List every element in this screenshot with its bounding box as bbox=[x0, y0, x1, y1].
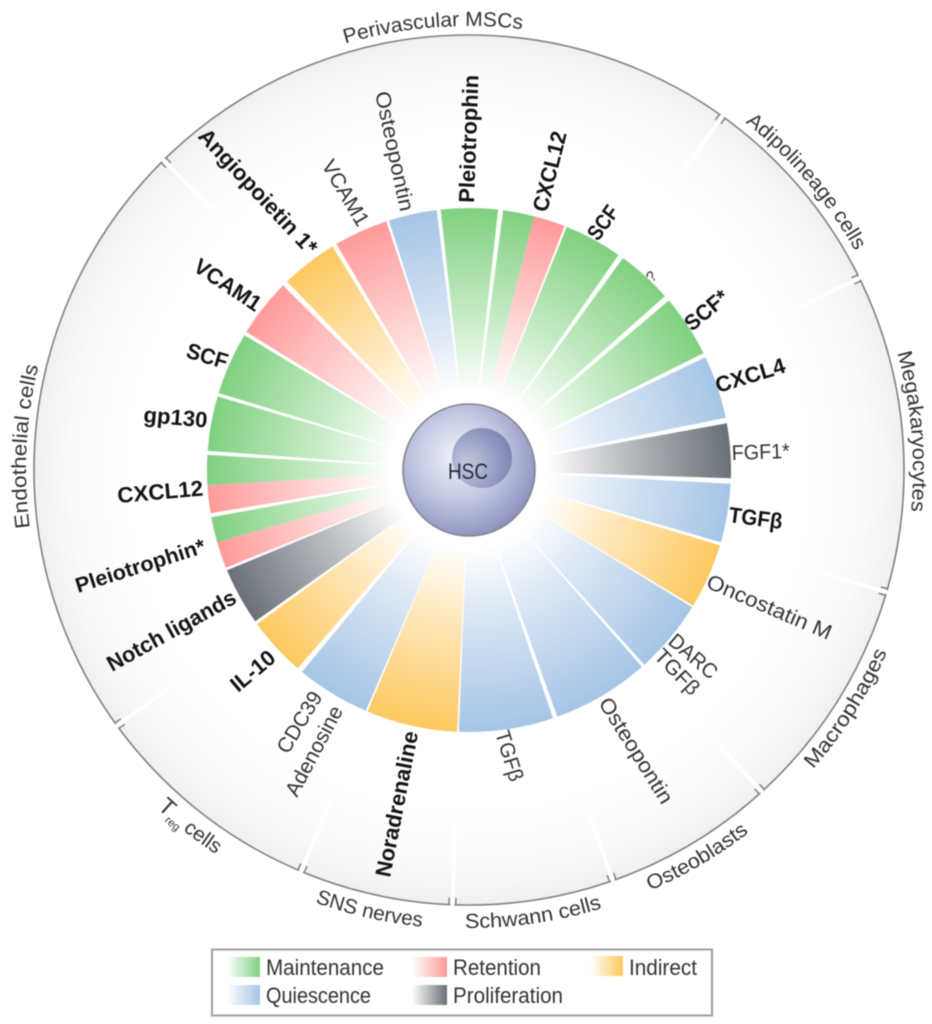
wedge chart bbox=[207, 208, 731, 732]
label: CXCL12 (endothelial): CXCL12 bbox=[116, 476, 204, 508]
wedge: gp130 bbox=[208, 396, 469, 470]
wedge: Pleiotrophin star retention bbox=[217, 470, 469, 568]
legend item: Indirect: Indirect bbox=[629, 955, 697, 980]
ring label: Treg cells: cells bbox=[184, 823, 221, 854]
ring label: Adipolineage cells: Adipolineage cells bbox=[745, 114, 864, 250]
wedge: FGF1 star bbox=[469, 423, 731, 478]
wedge: Noradrenaline bbox=[368, 470, 469, 732]
HSC cell bbox=[403, 404, 535, 536]
ring label: Treg cells: T bbox=[161, 796, 178, 814]
ring label: Treg cells: reg bbox=[164, 816, 180, 833]
ring label: Megakaryocytes: Megakaryocytes bbox=[897, 350, 927, 512]
ring label: Endothelial cells: Endothelial cells bbox=[10, 364, 38, 528]
label: CXCL12 (perivascular): CXCL12 bbox=[528, 129, 572, 214]
label: SCF (perivascular): SCF bbox=[582, 200, 624, 245]
outer niche ring bbox=[34, 35, 904, 910]
label: Osteopontin (osteoblasts): Osteopontin bbox=[594, 693, 677, 808]
wedge: CXCL4 bbox=[469, 357, 726, 470]
label: SCF (endothelial): SCF bbox=[184, 338, 231, 374]
label: SCF star: SCF* bbox=[679, 284, 734, 336]
wedge: TGF-beta and Osteopontin (osteoblasts) bbox=[469, 470, 642, 717]
label: Noradrenaline: Noradrenaline bbox=[370, 729, 423, 879]
wedge: Osteopontin (perivascular) bbox=[389, 210, 469, 470]
label: VCAM1 (perivascular): VCAM1 bbox=[317, 156, 373, 230]
HSC nucleus bbox=[452, 428, 512, 488]
wedge: CXCL12 maintenance (endothelial) bbox=[207, 455, 469, 485]
wedge: Angiopoietin 1 star bbox=[287, 246, 469, 470]
wedge: TGF-beta (Schwann cells) bbox=[459, 470, 553, 732]
legend item: Quiescence: Quiescence bbox=[266, 983, 371, 1008]
label: TGF-beta (macrophage/osteoblast): TGFβ bbox=[649, 644, 704, 700]
label: question mark: ? bbox=[643, 268, 661, 286]
wedge: VCAM1 (endothelial) bbox=[246, 285, 469, 470]
wedge: CXCL12 maintenance bbox=[469, 210, 534, 470]
label: Pleiotrophin star: Pleiotrophin* bbox=[73, 535, 209, 598]
legend item: Retention: Retention bbox=[453, 955, 541, 980]
wedge: Pleiotrophin star maintenance bbox=[211, 470, 469, 542]
label: IL-10: IL-10 bbox=[225, 645, 280, 697]
wedge: Pleiotrophin (perivascular) bbox=[441, 208, 498, 470]
label: TGF-beta (megakaryocytes): TGFβ bbox=[727, 502, 784, 534]
ring label: Perivascular MSCs: Perivascular MSCs bbox=[342, 11, 523, 44]
wedge: IL-10 bbox=[257, 470, 469, 668]
label: CDC39: CDC39 bbox=[273, 687, 327, 758]
wedge: DARC bbox=[469, 470, 692, 665]
wedge: CDC39 and Adenosine bbox=[302, 470, 469, 711]
ring label: Macrophages: Macrophages bbox=[803, 648, 886, 768]
wedge: SCF star (adipolineage) bbox=[469, 300, 704, 470]
HSC label: HSC bbox=[448, 459, 488, 484]
wedge: Oncostatin M bbox=[469, 470, 720, 606]
wedge: SCF (perivascular) bbox=[469, 227, 618, 470]
wedge: question mark (adipolineage) bbox=[469, 258, 665, 470]
wedge: Notch ligands bbox=[227, 470, 469, 621]
label: TGF-beta (Schwann): TGFβ bbox=[490, 728, 527, 784]
wedge: CXCL12 retention (endothelial) bbox=[207, 470, 469, 513]
legend item: Proliferation: Proliferation bbox=[453, 983, 563, 1008]
label: FGF1 star: FGF1* bbox=[731, 440, 790, 465]
legend bbox=[212, 950, 712, 1016]
label: Notch ligands: Notch ligands bbox=[102, 585, 240, 676]
wedge: SCF (endothelial) bbox=[219, 335, 469, 470]
label: CXCL4: CXCL4 bbox=[712, 353, 789, 398]
ring label: Osteoblasts: Osteoblasts bbox=[646, 824, 748, 889]
wedge: CXCL12 retention bbox=[469, 216, 565, 470]
ring label: SNS nerves: SNS nerves bbox=[316, 890, 422, 928]
wedge: TGF-beta (megakaryocytes) bbox=[469, 470, 731, 542]
label: DARC: DARC bbox=[664, 629, 722, 684]
legend item: Maintenance: Maintenance bbox=[266, 955, 384, 980]
label: VCAM1 (endothelial): VCAM1 bbox=[189, 253, 266, 316]
label: Adenosine: Adenosine bbox=[281, 702, 348, 800]
label: gp130: gp130 bbox=[143, 402, 208, 433]
label: Osteopontin (perivascular): Osteopontin bbox=[370, 89, 418, 213]
legend item: Proliferation bbox=[412, 983, 563, 1008]
label: Oncostatin M: Oncostatin M bbox=[703, 570, 835, 645]
ring label: Schwann cells: Schwann cells bbox=[466, 896, 602, 929]
label: Pleiotrophin: Pleiotrophin bbox=[454, 74, 483, 203]
wedge: VCAM1 (perivascular) bbox=[336, 221, 469, 470]
label: Angiopoietin 1 star: Angiopoietin 1* bbox=[193, 123, 323, 260]
legend item: Indirect bbox=[590, 955, 697, 980]
legend item: Quiescence bbox=[227, 983, 371, 1008]
legend item: Retention bbox=[412, 955, 541, 980]
